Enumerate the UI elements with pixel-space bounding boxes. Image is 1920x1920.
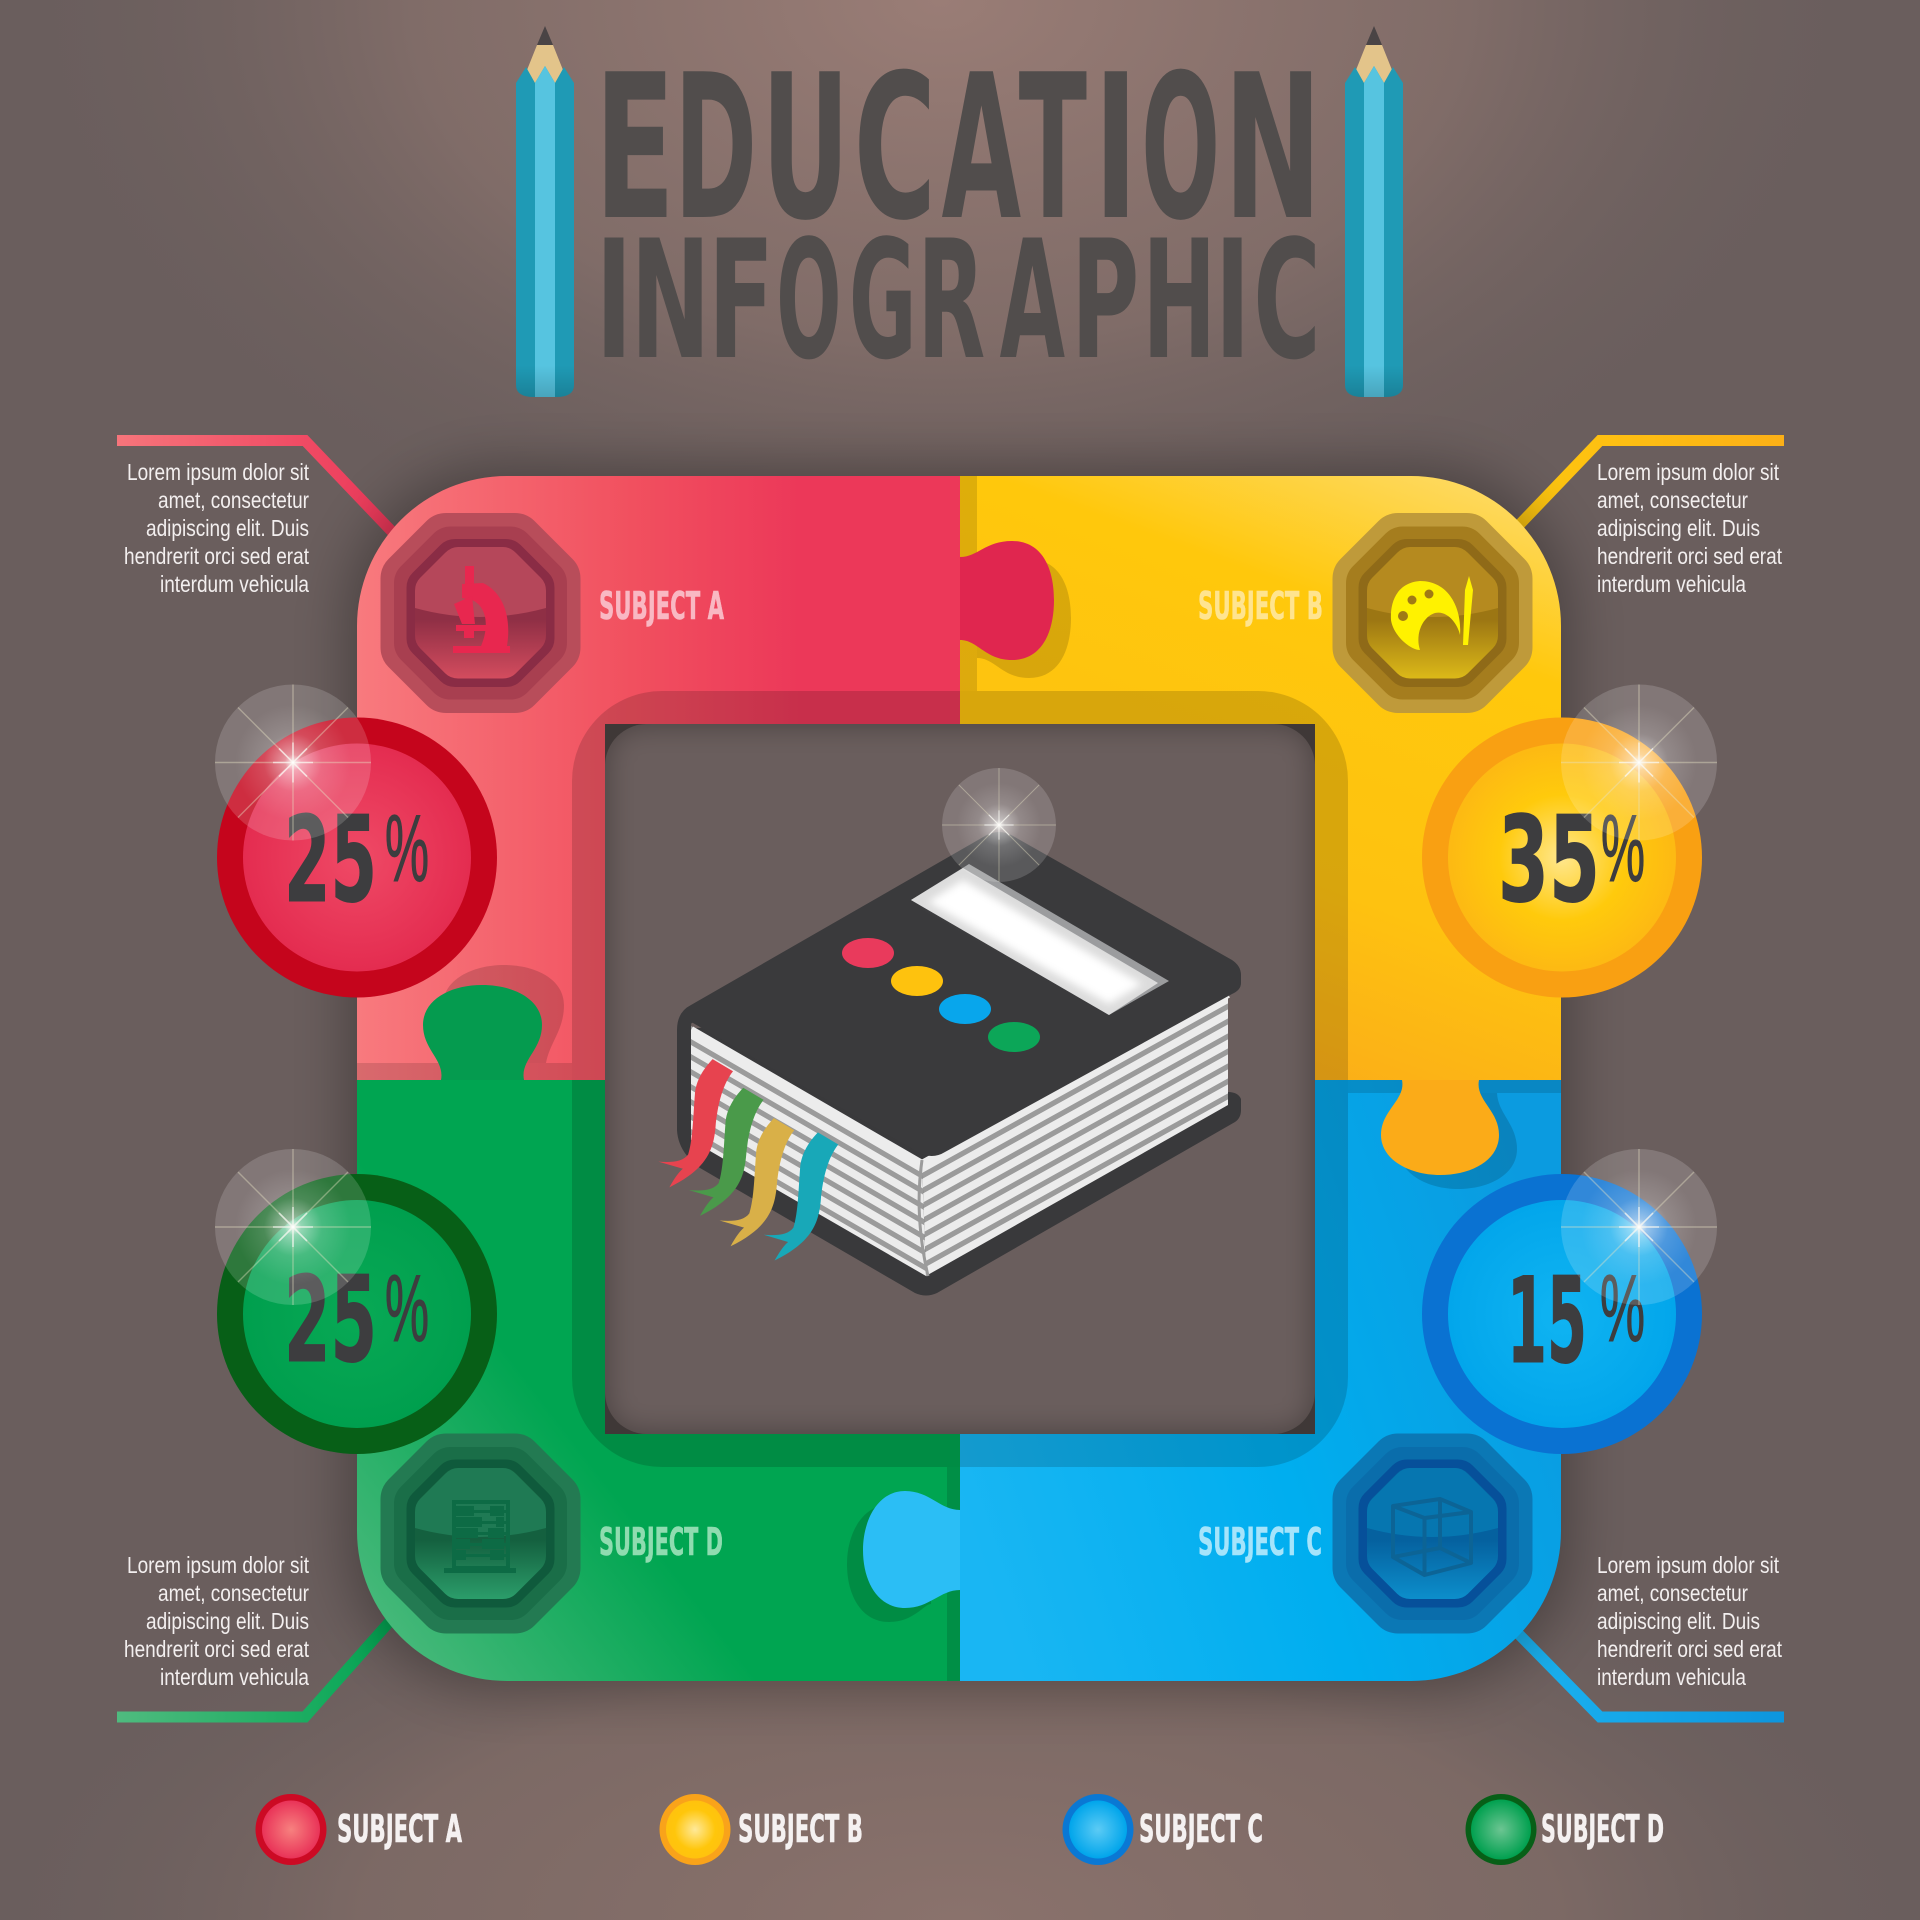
stat circle: subject A 25%: 25 <box>284 792 377 930</box>
title: G <box>849 205 917 396</box>
title: P <box>1071 205 1139 396</box>
title: I <box>1215 205 1250 396</box>
tab shadows <box>443 559 1517 1622</box>
title: H <box>1142 205 1216 396</box>
text block: subject D: Lorem ipsum dolor sit <box>127 1552 310 1578</box>
title: O <box>1141 32 1220 265</box>
text block: subject C: adipiscing elit. Duis <box>1597 1608 1760 1634</box>
book dots <box>842 938 1040 1052</box>
text block: subject A: interdum vehicula <box>160 571 309 597</box>
legend <box>256 1794 1664 1865</box>
text block: subject B: interdum vehicula <box>1597 571 1746 597</box>
text block: subject D: interdum vehicula <box>160 1664 309 1690</box>
title: T <box>1019 32 1087 265</box>
stat circle: subject C 15%: 15 <box>1507 1253 1587 1391</box>
stat circle: subject D 25%: % <box>385 1256 429 1362</box>
title: D <box>674 32 757 265</box>
icon: palette <box>1391 576 1473 650</box>
badge: subject A <box>380 513 580 713</box>
legend item: subject C <box>1062 1794 1263 1865</box>
connector: subject C <box>1500 1615 1784 1717</box>
icon: microscope <box>453 566 510 653</box>
text block: subject B: Lorem ipsum dolor sit <box>1597 459 1780 485</box>
legend item: subject A <box>256 1794 462 1865</box>
title: E <box>594 32 675 265</box>
text block: subject B: amet, consectetur <box>1597 487 1748 513</box>
title: I <box>595 205 633 396</box>
stat circle: subject D 25% <box>215 1149 497 1454</box>
title: I <box>1094 32 1138 265</box>
puzzle ring <box>357 476 1561 1681</box>
legend item: subject A: SUBJECT A <box>337 1807 462 1851</box>
text block: subject C: Lorem ipsum dolor sit <box>1597 1552 1780 1578</box>
centre window <box>590 709 1330 1449</box>
icon: wireframe cube <box>1393 1499 1471 1575</box>
connector: subject B <box>1500 440 1784 545</box>
text block: subject C <box>1597 1552 1782 1690</box>
tab: subject D <box>423 985 542 1080</box>
stat circle: subject C 15%: % <box>1600 1256 1645 1362</box>
puzzle piece C <box>960 1080 1561 1681</box>
title: U <box>761 32 850 265</box>
icon: abacus <box>444 1502 516 1573</box>
icon: right pencil <box>1345 26 1403 397</box>
legend item: subject B <box>660 1794 863 1865</box>
title: O <box>776 205 842 396</box>
text block: subject C: interdum vehicula <box>1597 1664 1746 1690</box>
badge: subject C <box>1332 1434 1532 1634</box>
book label <box>911 864 1169 1015</box>
text block: subject D: amet, consectetur <box>158 1580 309 1606</box>
title: A <box>942 32 1021 265</box>
text block: subject A <box>124 459 310 597</box>
title: C <box>854 32 936 265</box>
title <box>594 32 1322 396</box>
text block: subject C: hendrerit orci sed erat <box>1597 1636 1782 1662</box>
connector: subject A <box>117 440 400 540</box>
tab: subject B <box>1381 1080 1499 1175</box>
puzzle piece A <box>357 476 960 1080</box>
inner shadow band <box>572 691 1348 1467</box>
book back cover <box>677 1000 1241 1296</box>
text block: subject A: amet, consectetur <box>158 487 309 513</box>
text block: subject A: adipiscing elit. Duis <box>146 515 309 541</box>
stat circle: subject C 15% <box>1422 1149 1717 1454</box>
icon: book <box>658 832 1241 1296</box>
title: N <box>1224 32 1322 265</box>
puzzle piece D <box>357 1080 960 1681</box>
flare: book <box>942 768 1056 882</box>
title: C <box>1253 205 1321 396</box>
title: N <box>631 205 710 396</box>
title: F <box>708 205 774 396</box>
title: R <box>917 205 985 396</box>
book ribbons <box>658 1059 838 1261</box>
badge: subject D <box>380 1434 580 1634</box>
puzzle piece B <box>960 476 1561 1080</box>
stat circle: subject D 25%: 25 <box>284 1252 377 1390</box>
stat circle: subject B 35% <box>1422 684 1717 998</box>
text block: subject A: hendrerit orci sed erat <box>124 543 309 569</box>
badge: subject B <box>1332 513 1532 713</box>
book pages <box>691 990 1228 1276</box>
stat circle: subject B 35%: 35 <box>1498 792 1600 930</box>
legend item: subject D: SUBJECT D <box>1541 1807 1664 1851</box>
book top cover <box>677 832 1241 1156</box>
label: subject A: SUBJECT A <box>599 584 724 628</box>
text block: subject D: hendrerit orci sed erat <box>124 1636 309 1662</box>
stat circle: subject B 35%: % <box>1601 796 1645 902</box>
legend item: subject C: SUBJECT C <box>1139 1807 1263 1851</box>
title: A <box>1000 205 1065 396</box>
legend item: subject B: SUBJECT B <box>738 1807 863 1851</box>
text block: subject D: adipiscing elit. Duis <box>146 1608 309 1634</box>
seam shadows <box>357 476 1561 1681</box>
puzzle drop shadow <box>347 466 1571 1691</box>
tab: subject C <box>863 1491 960 1608</box>
text block: subject B: adipiscing elit. Duis <box>1597 515 1760 541</box>
label: subject B: SUBJECT B <box>1198 584 1323 628</box>
legend item: subject D <box>1466 1794 1664 1865</box>
label: subject D: SUBJECT D <box>599 1520 723 1564</box>
text block: subject B <box>1597 459 1782 597</box>
text block: subject C: amet, consectetur <box>1597 1580 1748 1606</box>
text block: subject D <box>124 1552 310 1690</box>
tab: subject A <box>960 541 1054 660</box>
connector: subject D <box>117 1610 400 1717</box>
icon: left pencil <box>516 26 574 397</box>
label: subject C: SUBJECT C <box>1198 1520 1322 1564</box>
text block: subject A: Lorem ipsum dolor sit <box>127 459 310 485</box>
stat circle: subject A 25%: % <box>385 796 429 902</box>
text block: subject B: hendrerit orci sed erat <box>1597 543 1782 569</box>
stat circle: subject A 25% <box>215 684 497 998</box>
